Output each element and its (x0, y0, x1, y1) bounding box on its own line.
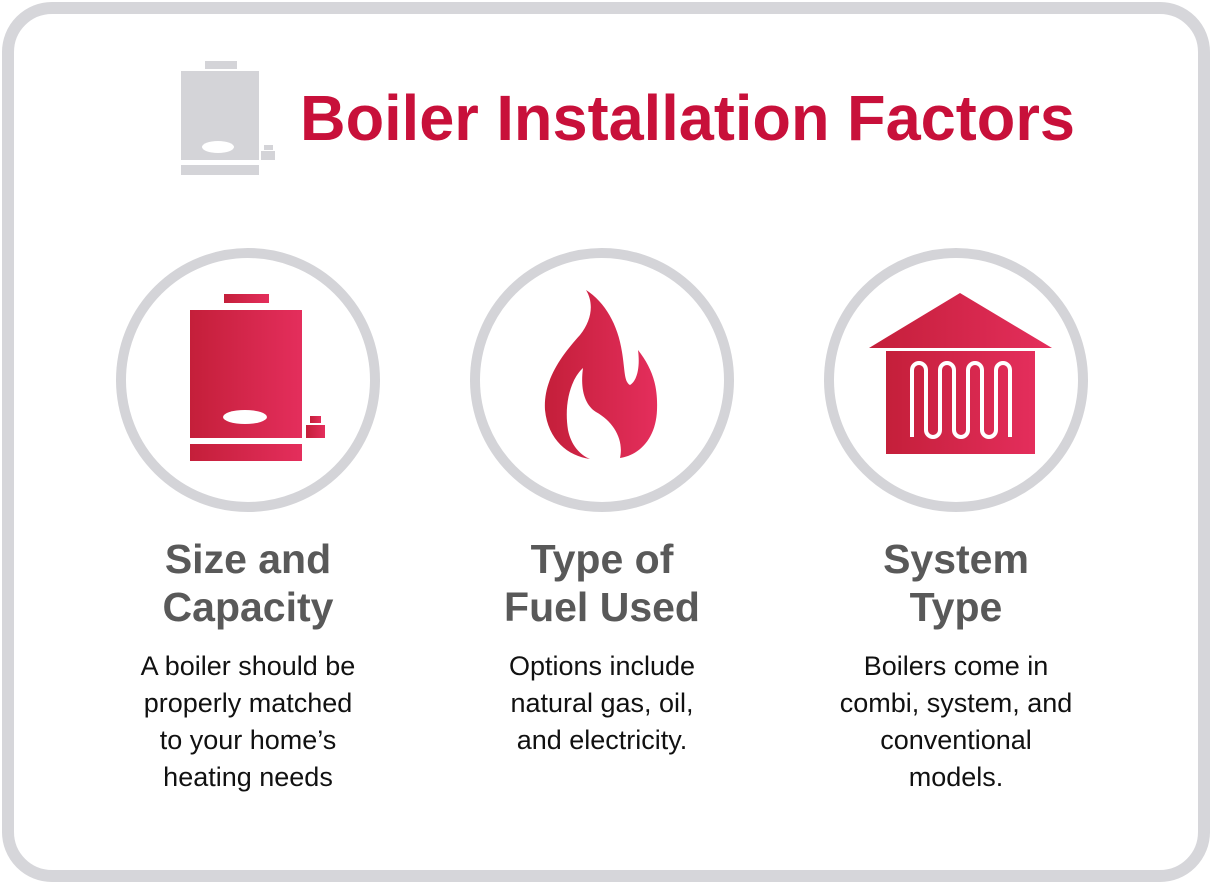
panel: size and capacity (121, 253, 375, 792)
body text: Options include (509, 651, 695, 681)
title: Boiler Installation Factors (300, 82, 1075, 154)
icon: house with radiator (869, 293, 1052, 454)
panel: type of fuel (475, 253, 729, 755)
icon: flame (545, 290, 657, 459)
icon: header boiler (181, 61, 275, 175)
icon circle: house (829, 253, 1083, 507)
body text: heating needs (163, 762, 333, 792)
heading: Type (910, 584, 1002, 630)
body text: and electricity. (517, 725, 687, 755)
heading: System (883, 536, 1029, 582)
body text: conventional (880, 725, 1032, 755)
heading: Capacity (163, 584, 334, 630)
panel: system type (829, 253, 1083, 792)
body text: A boiler should be (141, 651, 355, 681)
icon circle: flame (475, 253, 729, 507)
icon: boiler (190, 294, 325, 461)
heading: Fuel Used (504, 584, 700, 630)
icon circle: boiler (121, 253, 375, 507)
body text: models. (909, 762, 1003, 792)
heading: Size and (165, 536, 331, 582)
heading: Type of (531, 536, 674, 582)
body text: combi, system, and (840, 688, 1072, 718)
body text: properly matched (144, 688, 352, 718)
body text: to your home’s (160, 725, 336, 755)
body text: natural gas, oil, (510, 688, 694, 718)
body text: Boilers come in (864, 651, 1048, 681)
